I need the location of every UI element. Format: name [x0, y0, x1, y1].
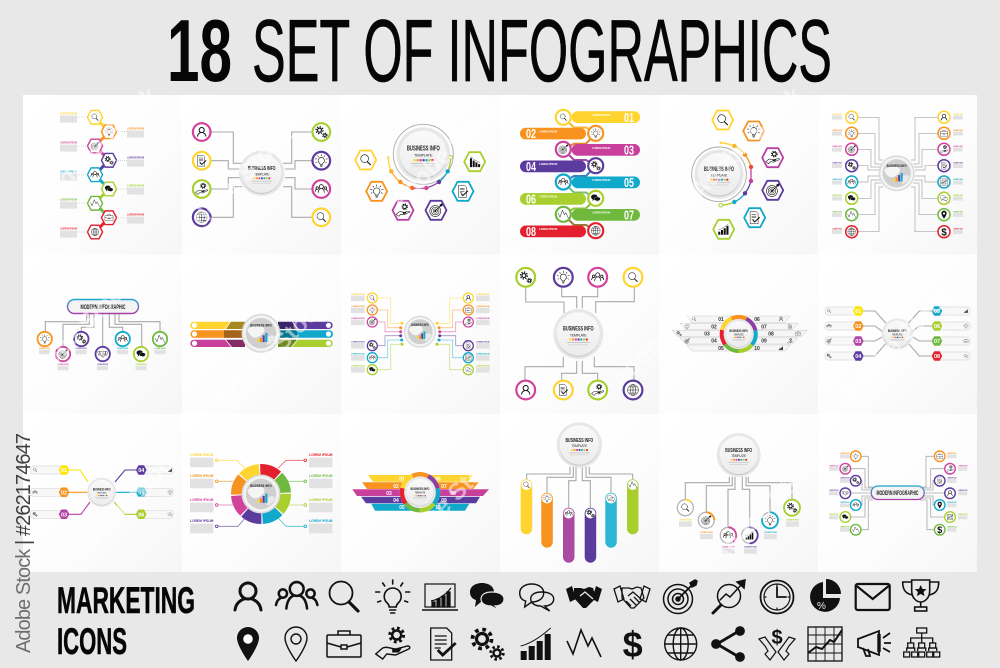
trapezoid rows	[352, 475, 489, 511]
arc dots	[387, 156, 453, 190]
central hub: BUSINESS INFO	[93, 487, 111, 491]
ribbon numbers: 05	[624, 176, 634, 190]
numbered hexagons	[59, 465, 147, 519]
connector dots	[399, 322, 441, 346]
central hub: BUSINESS INFO	[887, 164, 907, 168]
hexagon numbers: 06	[934, 324, 940, 330]
arc segments	[721, 143, 751, 205]
ribbon captions: LOREM IPSUM	[539, 227, 557, 231]
row numbers: 09	[441, 498, 447, 504]
watermarks: Adobe Stock	[15, 271, 138, 394]
labels	[60, 113, 144, 238]
rows	[30, 466, 173, 518]
connector lines	[45, 314, 160, 346]
central hub: TEMPLATE	[570, 333, 587, 337]
circle icons	[842, 453, 953, 535]
central hub: TEMPLATE	[415, 492, 426, 495]
watermarks: Adobe Stock	[210, 291, 333, 414]
central hub	[557, 422, 602, 468]
central hub: BUSINESS INFO	[563, 326, 594, 332]
arc segments	[388, 157, 451, 188]
capsules	[521, 479, 638, 563]
hexagon numbers	[855, 309, 940, 360]
ribbon numbers: 02	[526, 127, 536, 141]
ribbon captions: LOREM IPSUM	[539, 162, 557, 166]
watermarks: Adobe Stock	[835, 281, 958, 404]
coloured leader lines	[217, 460, 305, 526]
circle nodes	[193, 123, 330, 226]
panel: rainbow ring with chevron rows	[659, 254, 818, 414]
circle icons	[196, 127, 327, 223]
hexagon numbers: 07	[934, 339, 940, 345]
central hub: BUSINESS INFO	[411, 323, 429, 327]
rows	[825, 307, 970, 360]
row numbers: 10	[754, 346, 760, 352]
ribbon captions: LOREM IPSUM	[592, 146, 610, 150]
connector lines	[863, 311, 933, 356]
row numbers: 02	[393, 484, 399, 490]
row numbers: 06	[435, 476, 441, 482]
central hub	[242, 314, 280, 353]
central hub	[404, 477, 436, 508]
panel: fourteen node pill tree	[818, 414, 977, 572]
central hub: TEMPLATE	[254, 172, 270, 176]
rainbow ring	[393, 466, 447, 519]
circle nodes	[846, 111, 950, 238]
watermarks: Adobe Stock	[40, 81, 163, 204]
heading: marketing icons	[57, 580, 195, 662]
hexagon nodes	[355, 150, 485, 220]
labels	[39, 348, 166, 370]
row numbers: 03	[386, 491, 392, 497]
central hub	[717, 433, 761, 477]
central hub: BUSINESS INFO	[411, 486, 429, 491]
hexagon numbers: 04	[138, 468, 145, 474]
central hub	[879, 155, 915, 191]
hexagon nodes	[712, 110, 783, 239]
dashed leaders	[77, 117, 127, 232]
chevron rows	[672, 316, 807, 351]
row numbers	[704, 317, 774, 352]
hexagon numbers: 02	[855, 324, 861, 330]
title: 18	[167, 1, 232, 100]
ribbon captions: LOREM IPSUM	[539, 194, 557, 198]
row numbers: 05	[399, 505, 405, 511]
icon row: bottom	[237, 624, 940, 665]
row numbers: 08	[450, 491, 456, 497]
connector lines	[685, 477, 792, 527]
connector lines	[851, 456, 945, 530]
central hub	[882, 318, 913, 350]
panel: hub with eight circles	[182, 95, 341, 254]
watermarks: Adobe Stock	[685, 81, 808, 204]
arc dots	[719, 142, 753, 207]
row numbers	[386, 476, 456, 511]
row numbers: 09	[761, 339, 767, 345]
hexagon numbers: 04	[855, 354, 862, 360]
capsule circle tops	[522, 480, 638, 518]
hexagon nodes	[87, 110, 117, 239]
heading pill: MODERN INFOGRAPHIC	[80, 304, 126, 311]
central hub: TEMPLATE	[711, 174, 728, 178]
heading pill: MODERN INFOGRAPHIC	[876, 491, 919, 497]
progress circles	[677, 500, 800, 543]
progress arcs	[685, 500, 800, 543]
heading pill	[871, 486, 924, 500]
banner end caps	[192, 323, 331, 346]
outer thin ring	[692, 147, 746, 202]
circle nodes	[367, 293, 473, 375]
central hub	[404, 316, 436, 348]
central hub	[396, 127, 450, 181]
ribbon captions: LOREM IPSUM	[592, 113, 610, 117]
panel: progress ring tree	[659, 414, 818, 572]
ribbon captions: LOREM IPSUM	[592, 211, 610, 215]
row numbers: 07	[441, 484, 447, 490]
row numbers: 01	[399, 476, 405, 482]
central hub	[724, 319, 754, 349]
central hub: BUSINESS INFO	[407, 146, 440, 153]
watermarks: Adobe Stock	[385, 91, 508, 214]
row icons	[826, 309, 968, 358]
ribbon numbers: 04	[526, 160, 536, 174]
panel: coloured trapezoid rows	[341, 414, 500, 572]
watermarks: Adobe Stock	[65, 441, 188, 564]
title	[167, 1, 832, 100]
panel: side arc with hexagons	[659, 95, 818, 254]
donut segments	[236, 470, 286, 518]
hexagon numbers: 05	[138, 490, 144, 496]
circle icons	[682, 503, 797, 539]
circle nodes	[516, 268, 642, 399]
row numbers: 05	[718, 346, 724, 352]
watermarks: Adobe Stock	[705, 446, 828, 569]
panel: six numbered rows hub	[23, 414, 182, 572]
ribbon numbers: 03	[624, 144, 634, 158]
icon row: top	[235, 579, 939, 614]
connector lines	[527, 467, 633, 508]
ribbon numbers: 01	[624, 111, 634, 125]
row numbers: 03	[704, 331, 710, 337]
hexagon icons	[91, 114, 113, 236]
row numbers: 10	[435, 505, 441, 511]
circle icons	[369, 295, 472, 372]
labels	[829, 453, 967, 532]
central hub	[694, 150, 744, 199]
circle icons	[848, 114, 948, 238]
watermarks: Adobe Stock	[175, 121, 298, 244]
central hub	[553, 309, 603, 359]
panel: sixteen node tree	[818, 95, 977, 254]
hexagon icons	[718, 115, 780, 235]
hexagon numbers: 02	[61, 490, 67, 496]
hexagon icons	[361, 155, 480, 217]
leader dots	[215, 459, 307, 528]
central hub: TEMPLATE	[731, 454, 747, 458]
heading: marketing icons: ICONS	[57, 621, 127, 662]
circle icons	[520, 271, 638, 395]
coloured banners	[190, 322, 333, 347]
panel: arc with hexagons	[341, 95, 500, 254]
row icons	[677, 317, 801, 350]
capsule icons	[524, 482, 637, 517]
watermarks	[15, 81, 958, 569]
panel: top and bottom circle hub	[500, 254, 659, 414]
ribbon numbers: 06	[526, 192, 536, 206]
circle nodes	[556, 110, 603, 238]
watermarks: Adobe Stock	[385, 441, 508, 564]
central hub: TEMPLATE	[414, 153, 433, 158]
panel: six banner bars	[182, 254, 341, 414]
ribbon numbers	[526, 111, 634, 239]
ribbon numbers: 08	[526, 225, 536, 239]
row numbers: 04	[711, 339, 717, 345]
central hub: TEMPLATE	[572, 444, 588, 448]
row numbers: 08	[768, 331, 774, 337]
heading: marketing icons: MARKETING	[57, 580, 195, 621]
central hub	[239, 151, 284, 196]
connectors	[563, 117, 596, 231]
ribbon bars	[520, 111, 640, 237]
central hub: BUSINESS INFO	[250, 322, 272, 327]
stock id side text: Adobe Stock | #262174647	[13, 433, 35, 653]
central hub: BUSINESS INFO	[730, 328, 748, 333]
central hub: TEMPLATE	[892, 333, 903, 336]
outer thin ring	[393, 124, 453, 184]
rainbow ring	[713, 309, 764, 359]
panel: hanging capsules	[500, 414, 659, 572]
central hub: TEMPLATE	[734, 333, 744, 336]
numbered hexagons	[853, 306, 942, 361]
row numbers: 02	[711, 324, 717, 330]
circle nodes	[840, 451, 955, 535]
connector lines	[525, 287, 634, 381]
connector lines	[858, 117, 938, 232]
heading pill	[68, 300, 138, 314]
central hub: BUSINESS INFO	[250, 483, 272, 488]
hexagon numbers: 03	[855, 339, 861, 345]
central hub: BUSINESS INFO	[888, 328, 907, 333]
watermarks: Adobe Stock	[605, 271, 728, 394]
row numbers: 01	[718, 317, 724, 323]
hexagon numbers: 08	[934, 354, 940, 360]
central hub: BUSINESS INFO	[565, 438, 593, 444]
hexagon numbers	[61, 468, 145, 518]
coloured connector lines	[68, 470, 137, 514]
central hub: TEMPLATE	[97, 492, 107, 495]
ribbon captions	[539, 113, 610, 231]
panel: hexagon zigzag timeline	[23, 95, 182, 254]
hexagon numbers: 03	[61, 512, 67, 518]
hexagon numbers: 01	[61, 468, 67, 474]
panel: segmented donut	[182, 414, 341, 572]
row numbers: 07	[761, 324, 767, 330]
central hub: BUSINESS INFO	[704, 166, 734, 173]
ribbon captions: LOREM IPSUM	[539, 130, 557, 134]
hexagon numbers: 05	[934, 309, 940, 315]
labels	[679, 520, 799, 554]
coloured connector lines	[378, 298, 463, 370]
labels	[351, 294, 490, 373]
circle nodes	[38, 332, 167, 361]
connectors	[95, 117, 109, 232]
hexagon numbers: 01	[855, 309, 861, 315]
connector lines	[211, 132, 312, 217]
labels	[190, 453, 333, 533]
central hub: BUSINESS INFO	[725, 448, 752, 454]
circle icons	[558, 114, 600, 235]
panel: numbered ribbons	[500, 95, 659, 254]
panel: twelve node coloured tree	[341, 254, 500, 414]
central hub	[87, 478, 116, 507]
ribbon numbers: 07	[624, 208, 634, 222]
panel: eight numbered rows hub	[818, 254, 977, 414]
central hub	[242, 474, 280, 514]
hexagon numbers: 06	[138, 512, 144, 518]
panel: modern infographic pill tree	[23, 254, 182, 414]
row numbers: 04	[393, 498, 399, 504]
labels	[832, 114, 964, 234]
row icons	[32, 468, 172, 516]
central hub: BUSINESS INFO	[248, 166, 276, 172]
row numbers: 06	[754, 317, 760, 323]
circle icons	[40, 335, 165, 358]
ribbon captions: LOREM IPSUM	[592, 178, 610, 182]
